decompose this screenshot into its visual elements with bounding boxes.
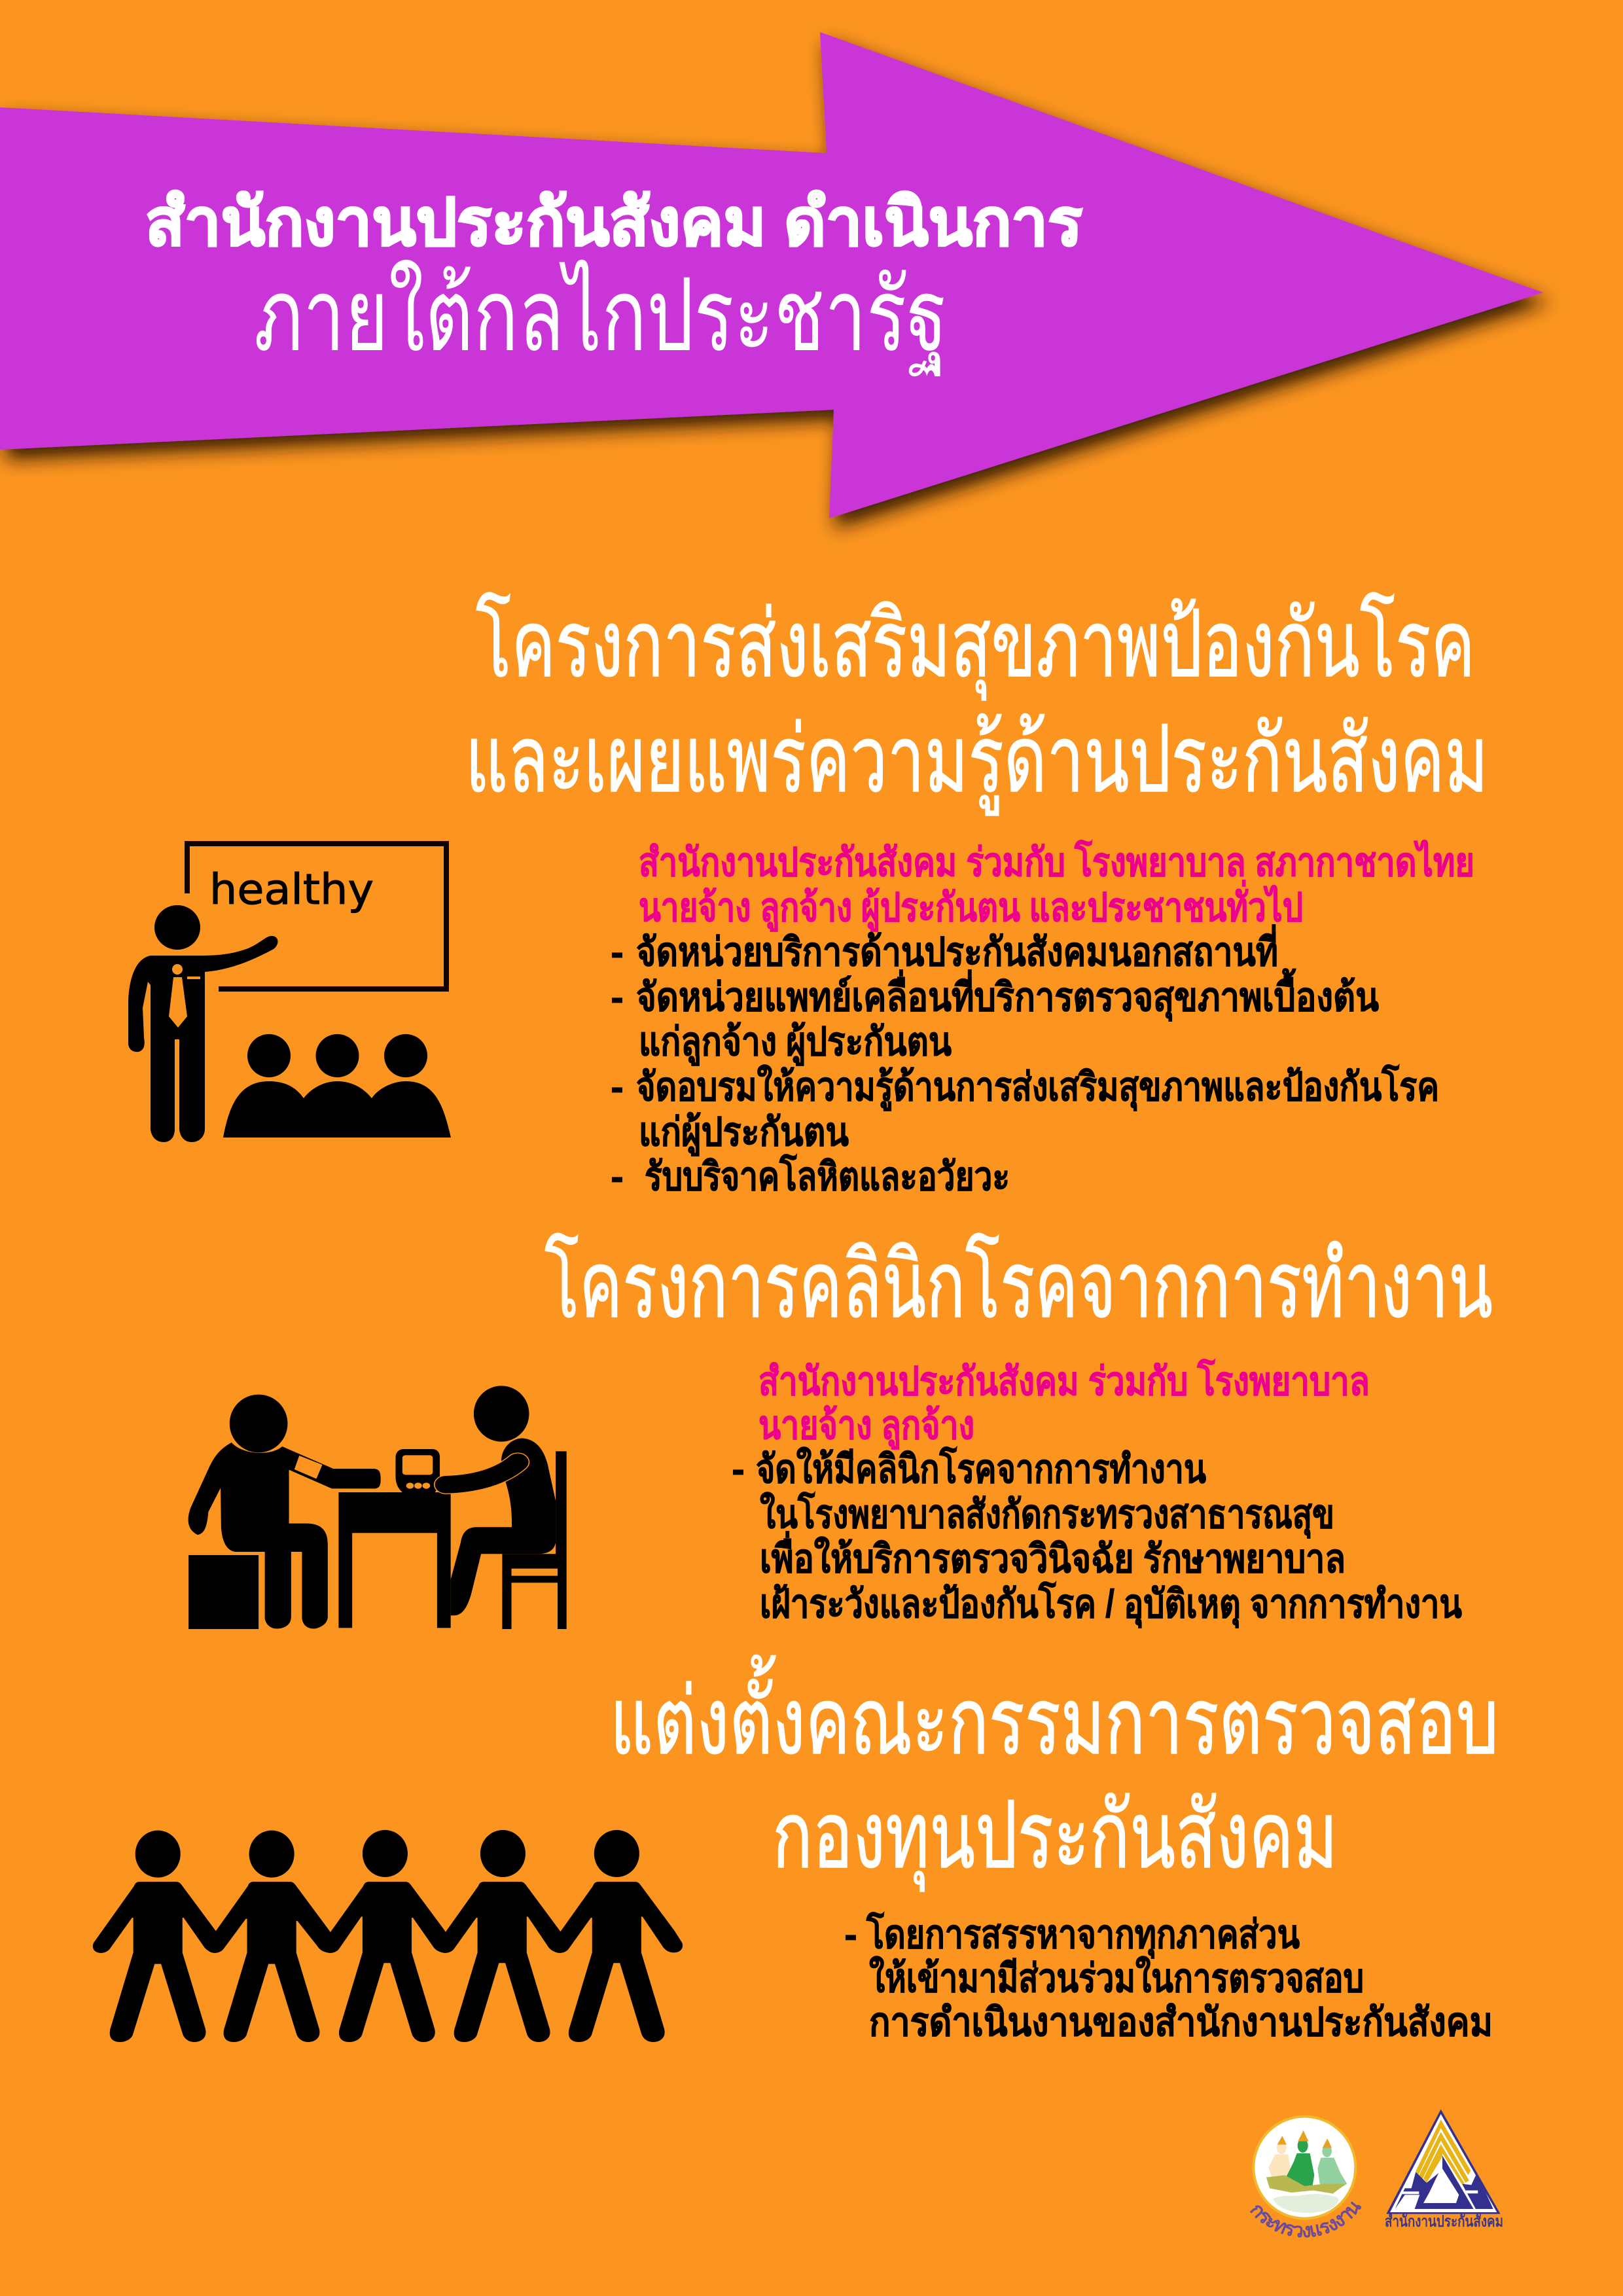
text block: project 2 partners bbox=[758, 1358, 1370, 1450]
text block: project 2 partners: นายจ้าง ลูกจ้าง bbox=[758, 1403, 974, 1450]
banner title bbox=[145, 186, 1082, 377]
icon: five people holding hands bbox=[93, 1830, 683, 2042]
text block: project 2 activities: เพื่อให้บริการตรวจวินิจฉัย รักษาพยาบาล bbox=[760, 1531, 1346, 1581]
banner title: สำนักงานประกันสังคม ดำเนินการ bbox=[145, 186, 1082, 259]
text block: project 1 activities: แก่ผู้ประกันตน bbox=[639, 1110, 849, 1157]
purple arrow banner bbox=[0, 32, 1543, 518]
heading: social security fund audit committee bbox=[610, 1655, 1499, 1892]
text block: project 1 activities: จัดหน่วยแพทย์เคลื่อนที่บริการตรวจสุขภาพเบื้องต้น bbox=[636, 968, 1379, 1022]
text block: project 2 activities: เฝ้าระวังและป้องกันโรค / อุบัติเหตุ จากการทำงาน bbox=[760, 1581, 1462, 1628]
text block: project 1 activities: - bbox=[611, 975, 624, 1019]
text block: project 1 partners bbox=[639, 839, 1474, 932]
banner title: ภายใต้กลไกประชารัฐ bbox=[254, 259, 948, 377]
text block: project 1 partners: สำนักงานประกันสังคม ร่วมกับ โรงพยาบาล สภากาชาดไทย bbox=[639, 839, 1474, 884]
logo: social security office bbox=[1386, 2109, 1501, 2214]
text block: project 1 activities: รับบริจาคโลหิตและอวัยวะ bbox=[645, 1153, 1010, 1198]
logo: ministry of labour bbox=[1252, 2115, 1357, 2220]
logo text: social security office: สำนักงานประกันสังคม bbox=[1385, 2213, 1503, 2231]
text block: project 3 activities: การดำเนินงานของสำนักงานประกันสังคม bbox=[869, 2000, 1493, 2044]
text block: project 3 activities: ให้เข้ามามีส่วนร่วมในการตรวจสอบ bbox=[869, 1956, 1364, 2000]
text block: project 1 activities: จัดหน่วยบริการด้านประกันสังคมนอกสถานที่ bbox=[636, 924, 1278, 974]
text block: project 2 activities: - bbox=[732, 1447, 745, 1491]
text block: project 2 activities: จัดให้มีคลินิกโรคจากการทำงาน bbox=[756, 1446, 1206, 1491]
text block: project 3 activities bbox=[844, 1911, 1493, 2044]
heading: social security fund audit committee: กองทุนประกันสังคม bbox=[772, 1784, 1338, 1892]
text block: project 1 activities: แก่ลูกจ้าง ผู้ประกันตน bbox=[639, 1020, 952, 1066]
text block: project 2 partners: สำนักงานประกันสังคม ร่วมกับ โรงพยาบาล bbox=[758, 1358, 1370, 1403]
text block: project 2 activities: ในโรงพยาบาลสังกัดกระทรวงสาธารณสุข bbox=[760, 1491, 1334, 1539]
heading: health promotion project bbox=[465, 592, 1488, 816]
text block: project 2 activities bbox=[732, 1446, 1462, 1628]
text block: project 1 activities: จัดอบรมให้ความรู้ด้านการส่งเสริมสุขภาพและป้องกันโรค bbox=[636, 1064, 1439, 1111]
text block: project 1 activities: - bbox=[611, 930, 624, 974]
icon: patient and nurse at a table bbox=[188, 1386, 567, 1629]
text block: project 1 partners: นายจ้าง ลูกจ้าง ผู้ประกันตน และประชาชนทั่วไป bbox=[639, 880, 1303, 932]
text block: project 3 activities: โดยการสรรหาจากทุกภาคส่วน bbox=[866, 1911, 1300, 1959]
text block: project 3 activities: - bbox=[844, 1912, 857, 1956]
icon: teacher with board and audience bbox=[128, 844, 451, 1142]
text block: project 1 activities: - bbox=[611, 1155, 624, 1198]
text block: project 1 activities bbox=[611, 924, 1439, 1198]
text block: project 1 activities: - bbox=[611, 1065, 624, 1109]
logo text: ministry of labour: กระทรวงแรงงาน bbox=[1250, 2201, 1361, 2238]
icon: teacher with board and audience: healthy bbox=[209, 866, 374, 914]
